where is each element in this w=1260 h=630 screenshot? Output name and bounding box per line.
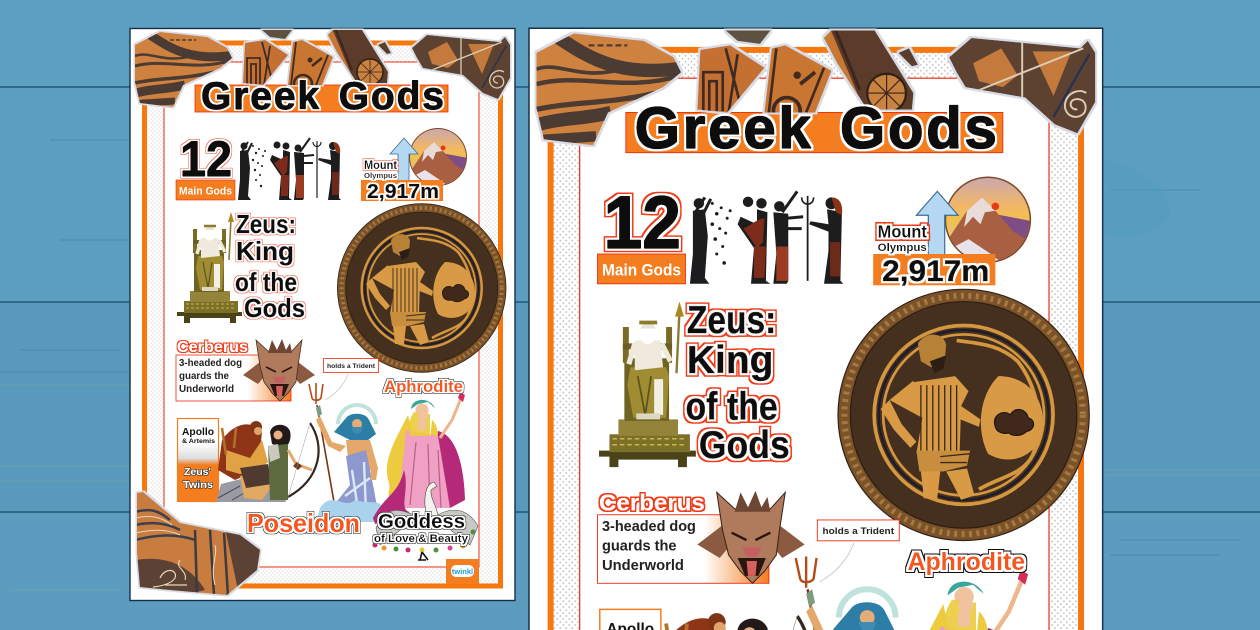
panel: Cerberus: Cerberus [177,339,248,356]
heading: Zeus King of the Gods: Gods [244,293,305,323]
heading: Zeus King of the Gods: of the [685,385,778,428]
heading: Poseidon: Poseidon [247,508,360,538]
panel: Apollo and Artemis: Zeus' [184,467,211,478]
panel: Cerberus: guards the [602,539,677,555]
stat: Mount Olympus height: 2,917m [367,181,439,203]
heading: Zeus King of the Gods: Zeus: [687,299,776,342]
title: Greek Gods [635,96,997,161]
illustration: Cerberus head [697,491,805,583]
stat: 12 main gods: 12 [603,181,681,264]
stat: 12 main gods: Main Gods [602,262,681,280]
illustration: Aphrodite [372,392,478,560]
stat: Mount Olympus height [361,158,443,203]
illustration: Apollo and Artemis [657,613,810,630]
heading: Zeus King of the Gods: King [687,339,773,382]
panel: Cerberus: Underworld [179,384,234,395]
illustration: Cerberus head [243,339,315,401]
heading: Zeus King of the Gods: Gods [699,424,790,467]
illustration: Poseidon [796,556,907,630]
heading: Goddess of Love and Beauty: Goddess [378,511,465,533]
callout: holds a Trident: holds a Trident [823,526,894,536]
heading: Zeus King of the Gods [685,299,790,467]
panel: Apollo and Artemis: & Artemis [182,439,216,445]
panel: Cerberus: Underworld [602,558,684,574]
title: Greek Gods [201,75,444,118]
twinkl logo tab: twinkl [452,567,473,576]
poster: right enlarged cropped view [529,28,1103,630]
stat: Mount Olympus height: Olympus [364,171,397,180]
icon: four god silhouettes [690,191,843,284]
poster sheet [529,28,1103,630]
illustration: Apollo and Artemis [216,421,319,502]
arrow: height up [390,138,418,181]
heading: Zeus King of the Gods: Zeus: [236,209,296,239]
panel: Cerberus: Cerberus [599,489,705,515]
title banner [195,85,448,112]
heading: Zeus King of the Gods [235,209,305,323]
icon: four god silhouettes [238,138,341,200]
icon: mountain circle [945,177,1033,266]
stat: Mount Olympus height: Olympus [878,242,927,254]
heading: Zeus King of the Gods: of the [235,267,297,297]
arrow: height up [916,191,958,255]
stat: Mount Olympus height: 2,917m [882,255,989,288]
heading: Goddess of Love and Beauty [374,511,469,545]
pottery shard: bottom left [130,492,265,600]
illustration: Aphrodite [890,570,1048,630]
illustration: Poseidon [309,383,384,522]
stat: 12 main gods: 12 [180,131,232,187]
panel: Cerberus [176,339,291,401]
stat: Mount Olympus height: Mount [364,158,397,172]
illustration: Zeus on throne [177,212,242,323]
heading: Aphrodite: Aphrodite [384,377,463,396]
illustration: Zeus on throne [599,302,696,467]
heading: Aphrodite: Aphrodite [907,548,1025,576]
stat: Mount Olympus height: Mount [878,222,927,242]
panel: Cerberus [598,489,769,583]
panel: Cerberus: 3-headed dog [602,519,696,535]
heading: Zeus King of the Gods: King [236,236,294,266]
callout: holds a Trident [817,520,899,582]
panel: Apollo and Artemis [178,418,218,502]
illustration: red-figure plate of Zeus [337,204,506,372]
pottery shards: top [130,28,510,107]
dotted border frame [551,50,1081,630]
poster sheet [130,28,515,600]
title banner [626,112,1003,153]
panel: Apollo and Artemis: Twins [183,480,213,491]
twinkl logo tab [446,559,479,584]
panel: Apollo and Artemis: Apollo [182,426,214,438]
illustration: red-figure plate of Zeus [838,289,1089,541]
dotted border frame [144,43,500,586]
stat: Mount Olympus height [873,222,995,288]
heading: Goddess of Love and Beauty: of Love & Beauty [374,533,469,545]
panel: Cerberus: guards the [179,371,229,382]
pottery shards: top [529,28,1095,145]
poster: left small full view [130,28,515,600]
callout: holds a Trident [324,358,378,400]
panel: Cerberus: 3-headed dog [179,358,242,369]
stat: 12 main gods: Main Gods [179,186,232,198]
icon: mountain circle [409,128,468,188]
panel: Apollo and Artemis [600,609,661,630]
callout: holds a Trident: holds a Trident [327,364,375,370]
